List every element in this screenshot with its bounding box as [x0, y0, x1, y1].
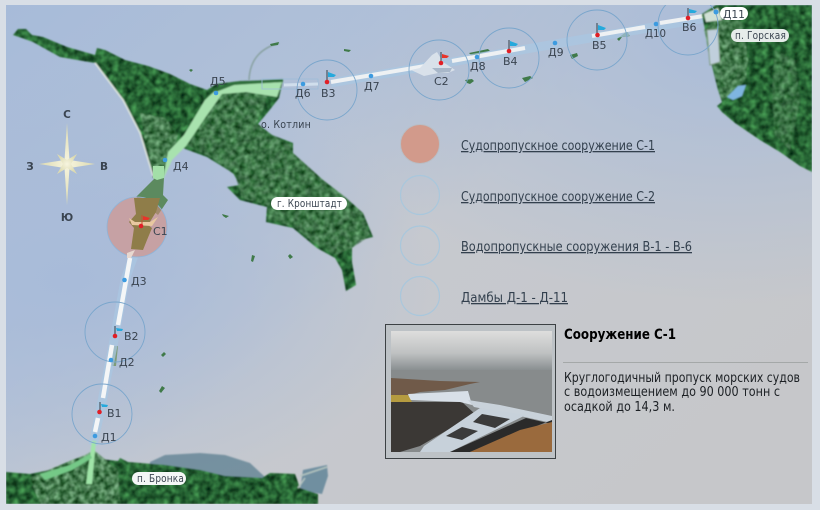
C-1 highlight circle: [107, 197, 167, 258]
legend: [400, 124, 692, 316]
legend item: С-2: [400, 176, 655, 214]
structure labels: С1: [153, 225, 168, 238]
compass rose: Ю: [61, 212, 73, 224]
Kotlin island: [13, 29, 373, 291]
small islands: [112, 31, 630, 393]
legend item: С-1: [400, 124, 655, 164]
compass rose: В: [100, 161, 108, 173]
structure labels: Д4: [173, 160, 189, 173]
description text: с водоизмещением до 90 000 тонн с: [564, 385, 780, 400]
structure C-2: [411, 52, 455, 76]
legend item: В-1 - В-6: [400, 226, 692, 265]
compass rose: З: [26, 161, 34, 173]
legend item: Д-1 - Д-11: [400, 276, 568, 316]
compass rose: С: [63, 109, 71, 121]
dam: south line: [89, 270, 124, 446]
structure labels: Д10: [645, 27, 666, 40]
place name labels: о. Котлин: [261, 119, 311, 131]
legend item: Д-1 - Д-11: Дамбы Д-1 - Д-11: [461, 291, 568, 306]
structure labels: В5: [592, 39, 607, 52]
photo of structure C-1: [386, 324, 556, 458]
place name labels: г. Кронштадт: [277, 198, 342, 210]
legend item: С-2: Судопропускное сооружение С-2: [461, 190, 655, 205]
structure labels: Д3: [131, 275, 147, 288]
structure circles: [72, 0, 718, 444]
structure labels: В2: [124, 330, 139, 343]
Bronka shore: [6, 441, 328, 504]
structure labels: В1: [107, 407, 122, 420]
spit towards C-1: [136, 178, 168, 215]
structure labels: Д7: [364, 80, 380, 93]
structure labels: [101, 21, 697, 444]
structure labels: Д5: [210, 75, 226, 88]
structure labels: С2: [434, 75, 449, 88]
structure labels: Д2: [119, 356, 135, 369]
legend item: С-1: Судопропускное сооружение С-1: [461, 139, 655, 154]
place name labels: Д11: [723, 8, 745, 21]
structure labels: В4: [503, 55, 518, 68]
place name labels: п. Горская: [735, 30, 786, 42]
description text: осадкой до 14,3 м.: [564, 400, 675, 415]
markers: flags and red dots: [93, 8, 718, 438]
structure labels: Д6: [295, 87, 311, 100]
structure labels: В6: [682, 21, 697, 34]
compass rose: [26, 109, 108, 224]
heading: Сооружение С-1: Сооружение С-1: [564, 327, 676, 343]
place name labels: п. Бронка: [137, 473, 184, 485]
place name labels: [132, 7, 789, 485]
legend item: В-1 - В-6: Водопропускные сооружения В-1 - В-6: [461, 240, 692, 255]
structure labels: Д8: [470, 60, 486, 73]
structure labels: Д1: [101, 431, 117, 444]
dam: north-east line: [262, 79, 318, 89]
structure labels: Д9: [548, 46, 564, 59]
Gorskaya shore: [702, 5, 812, 172]
description text: [564, 371, 800, 415]
structure labels: В3: [321, 87, 336, 100]
